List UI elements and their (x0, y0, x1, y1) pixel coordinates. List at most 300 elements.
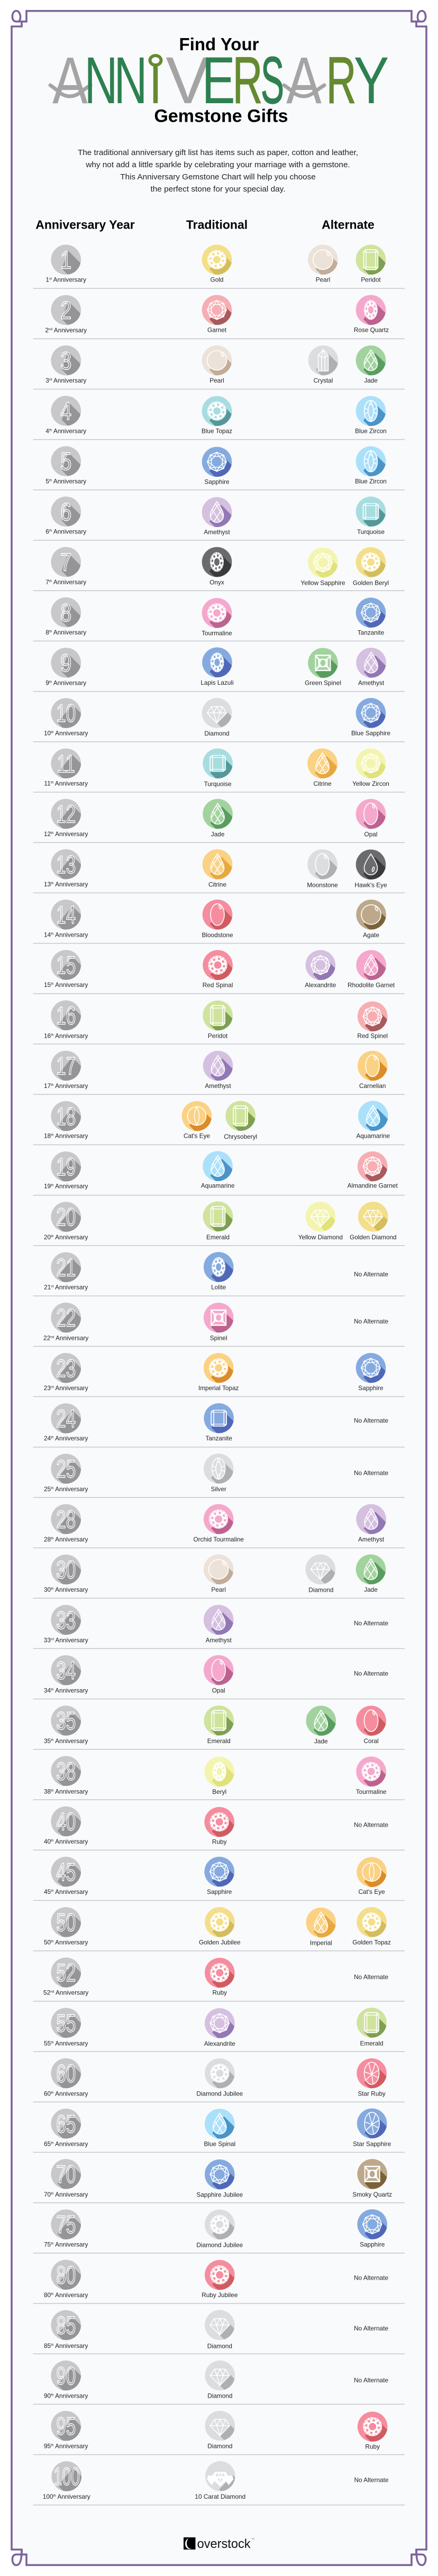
year badge 9: th (49, 680, 52, 684)
gem: Chrysoberyl: Chrysoberyl (224, 1133, 257, 1140)
year badge 13: Anniversary (54, 881, 88, 888)
year badge 12: th (51, 831, 54, 835)
year badge 75: 75 (56, 2210, 76, 2239)
title (50, 34, 389, 126)
gem: Almandine Garnet: Almandine Garnet (348, 1182, 398, 1190)
gem: Beryl: Beryl (212, 1788, 226, 1795)
gem: Diamond (202, 698, 243, 744)
gem: Ruby (205, 1958, 245, 2003)
gem: Yellow Zircon (352, 748, 396, 794)
gem: Blue Spinal: Blue Spinal (204, 2140, 235, 2148)
gem: Yellow Diamond: Yellow Diamond (298, 1233, 343, 1241)
year badge 9: 9 (45, 679, 49, 686)
year badge 85: 85 (44, 2342, 51, 2350)
gem: Amethyst (356, 1504, 397, 1550)
year badge 8: 8 (45, 629, 49, 636)
year badge 12 (44, 799, 94, 845)
gem: Blue Zircon (355, 396, 396, 442)
year badge 35: th (51, 1738, 54, 1742)
row: 13th anniversary (44, 849, 396, 895)
gem: Golden Jubilee (199, 1907, 245, 1953)
gem: Silver (204, 1454, 244, 1499)
gem: Star Ruby (357, 2058, 397, 2104)
year badge 12: 12 (44, 830, 51, 838)
year badge 7: 7 (60, 549, 71, 577)
gem: Aquamarine (356, 1101, 398, 1147)
heading: Find Your: Find Your (179, 34, 259, 54)
year badge 7: 7 (45, 578, 49, 586)
gem: Onyx: Onyx (209, 579, 224, 586)
gem: Hawk's Eye (354, 849, 396, 895)
year badge 23: Anniversary (54, 1384, 88, 1392)
year badge 12: 12 (56, 800, 76, 828)
row: 90th anniversary (44, 2361, 388, 2407)
gem: 10 Carat Diamond: 10 Carat Diamond (195, 2493, 245, 2500)
gem: Jade (356, 346, 396, 391)
gem: Peridot: Peridot (208, 1032, 228, 1040)
gem: Diamond (306, 1554, 347, 1601)
year badge 7: Anniversary (52, 578, 86, 586)
logo: overstock: overstock (197, 2537, 251, 2551)
year badge 1: Anniversary (52, 276, 86, 284)
gem: Coral: Coral (363, 1737, 379, 1745)
year badge 2: Anniversary (52, 326, 87, 334)
gem: Amethyst (356, 648, 397, 693)
column headings: Anniversary Year (35, 218, 135, 232)
year badge 3: 3 (60, 347, 71, 375)
year badge 6 (45, 496, 89, 542)
year badge 52: Anniversary (54, 1989, 88, 1996)
year badge 3: rd (49, 378, 52, 382)
year badge 21 (44, 1252, 94, 1298)
year badge 13: th (51, 882, 54, 885)
gem: Ruby: Ruby (213, 1989, 227, 1997)
gem: Blue Spinal (204, 2109, 245, 2154)
year badge 18: 18 (44, 1132, 51, 1140)
row: 18th anniversary (44, 1101, 398, 1147)
year badge 5: th (49, 478, 52, 483)
year badge 17 (44, 1051, 94, 1096)
row: 30th anniversary (44, 1554, 396, 1601)
year badge 45: th (51, 1889, 54, 1893)
year badge 24: Anniversary (54, 1435, 88, 1442)
year badge 65: 65 (44, 2140, 51, 2147)
gem: Aquamarine: Aquamarine (201, 1182, 235, 1190)
year badge 10: th (51, 730, 54, 734)
row: 16th anniversary (44, 1000, 398, 1047)
row: 55th anniversary (44, 2008, 397, 2054)
heading: Anniversary stylised word: I (149, 44, 162, 118)
year badge 24: 24 (56, 1404, 76, 1432)
gem: Pearl: Pearl (209, 377, 224, 384)
year badge 90: 90 (56, 2362, 76, 2390)
gem: Imperial: Imperial (310, 1939, 332, 1946)
gem: Red Spinal (203, 950, 243, 996)
year badge 95: th (51, 2444, 54, 2447)
gem: Sapphire: Sapphire (360, 2241, 385, 2248)
year badge 23 (44, 1353, 94, 1399)
year badge 30: 30 (56, 1556, 76, 1584)
gem: Tourmaline (202, 598, 242, 643)
year badge 45: 45 (56, 1858, 76, 1886)
year badge 14: Anniversary (54, 931, 88, 938)
heading: Anniversary stylised word (50, 43, 389, 118)
gem: Star Sapphire: Star Sapphire (353, 2140, 391, 2147)
gem: Spinel (204, 1303, 244, 1348)
gem: Jade (203, 799, 243, 845)
gem: Peridot: Peridot (361, 276, 381, 284)
year badge 25: 25 (44, 1485, 51, 1493)
note: no alternate: No Alternate (354, 1470, 388, 1477)
gem: Blue Zircon: Blue Zircon (355, 427, 387, 434)
gem: Beryl (204, 1757, 245, 1802)
note: no alternate: No Alternate (354, 2325, 388, 2332)
gem: Sapphire (202, 447, 242, 493)
row: 17th anniversary (44, 1051, 398, 1096)
year badge 13: 13 (56, 850, 76, 878)
gem: Rose Quartz (354, 295, 396, 341)
gem: Coral (356, 1706, 397, 1752)
row: 28th anniversary (44, 1504, 397, 1550)
row: 5th anniversary (45, 446, 396, 493)
year badge 6: 6 (60, 498, 71, 526)
gem: Pearl: Pearl (316, 276, 330, 284)
gem: Emerald (203, 1201, 243, 1247)
year badge 45 (44, 1857, 94, 1902)
gem: Amethyst (203, 1051, 243, 1096)
year badge 16: th (51, 1033, 54, 1037)
gem: Blue Sapphire: Blue Sapphire (351, 730, 390, 737)
row: 95th anniversary (44, 2411, 398, 2457)
year badge 52: 52 (56, 1958, 76, 1987)
year badge 10: 10 (56, 699, 76, 728)
gem: Amethyst: Amethyst (358, 679, 385, 687)
year badge 80: 80 (56, 2261, 76, 2289)
year badge 50: Anniversary (54, 1939, 88, 1946)
year badge 80: 80 (44, 2291, 51, 2299)
intro text block: The traditional anniversary gift list has items such as paper, cotton and leather, (78, 148, 358, 157)
gem: Alexandrite (305, 950, 346, 996)
year badge 19: 19 (44, 1183, 51, 1190)
year badge 2 (45, 295, 89, 340)
gem: Alexandrite (204, 2008, 245, 2054)
year badge 55: 55 (56, 2009, 76, 2037)
year badge 15 (44, 950, 94, 996)
year badge 50: th (51, 1940, 54, 1944)
gem: Tourmaline: Tourmaline (202, 629, 232, 637)
gem: Blue Zircon (355, 446, 396, 492)
gem: Ruby: Ruby (212, 1838, 227, 1846)
year badge 52: nd (50, 1990, 54, 1994)
gem: Golden Topaz: Golden Topaz (352, 1939, 391, 1946)
year badge 25 (44, 1454, 94, 1500)
row: 21st anniversary (44, 1252, 388, 1298)
year badge 85: Anniversary (54, 2342, 88, 2350)
year badge 15: 15 (56, 951, 76, 979)
year badge 95: Anniversary (54, 2443, 88, 2450)
gem: Amethyst (204, 1605, 244, 1650)
year badge 15: th (51, 982, 54, 986)
gem: Tourmaline: Tourmaline (356, 1788, 387, 1795)
year badge 85 (44, 2310, 94, 2356)
year badge 12: Anniversary (54, 830, 88, 838)
gem: Amethyst: Amethyst (204, 529, 230, 536)
year badge 4: th (49, 428, 52, 432)
gem: Golden Diamond: Golden Diamond (350, 1233, 397, 1241)
year badge 22 (43, 1303, 94, 1348)
year badge 50 (44, 1907, 94, 1953)
year badge 13: 13 (44, 881, 51, 888)
note: no alternate: No Alternate (354, 1973, 388, 1981)
gem: Sapphire (204, 1857, 245, 1902)
year badge 23: rd (51, 1385, 54, 1389)
year badge 22: Anniversary (54, 1334, 88, 1341)
year badge 25: 25 (56, 1455, 76, 1483)
gem: Amethyst: Amethyst (206, 1637, 232, 1644)
gem: Sapphire: Sapphire (358, 1384, 384, 1392)
year badge 100: 100 (43, 2493, 53, 2500)
year badge 100: Anniversary (56, 2493, 90, 2500)
gem: Peridot (203, 1001, 243, 1046)
year badge 90: Anniversary (54, 2392, 88, 2399)
year badge 80: Anniversary (54, 2291, 88, 2299)
year badge 25: th (51, 1486, 54, 1490)
row: 65th anniversary (44, 2108, 397, 2154)
gem: Diamond Jubilee (196, 2209, 245, 2255)
year badge 85: th (51, 2343, 54, 2347)
year badge 33: 33 (44, 1637, 51, 1644)
gem: Emerald (357, 2008, 397, 2053)
gem: Ruby (358, 2411, 398, 2457)
year badge 28: Anniversary (54, 1536, 88, 1543)
row: 1st anniversary (45, 244, 396, 291)
year badge 24: th (51, 1436, 54, 1439)
gem: Bloodstone (202, 900, 243, 945)
year badge 95: 95 (56, 2412, 76, 2440)
row: 70th anniversary (44, 2159, 398, 2205)
gem: Blue Topaz (202, 396, 242, 442)
row: 75th anniversary (44, 2209, 398, 2255)
year badge 85: 85 (56, 2311, 76, 2339)
year badge 20 (44, 1202, 94, 1248)
year badge 70 (44, 2159, 94, 2205)
gem: Peridot (356, 244, 396, 291)
year badge 60: 60 (56, 2060, 76, 2088)
gem: Jade: Jade (364, 377, 378, 384)
gem: Jade: Jade (364, 1586, 378, 1593)
year badge 11: Anniversary (53, 780, 88, 787)
year badge 90 (44, 2361, 94, 2406)
year badge 65: th (51, 2142, 54, 2145)
gem: Red Spinel (357, 1001, 398, 1047)
gem: Turquoise (203, 748, 243, 794)
gem: Tanzanite: Tanzanite (205, 1435, 232, 1442)
gem: Yellow Sapphire (300, 548, 348, 593)
gem: Golden Beryl: Golden Beryl (353, 579, 389, 586)
year badge 7 (45, 547, 89, 592)
year badge 17: th (51, 1083, 54, 1087)
year badge 16: 16 (44, 1032, 51, 1039)
year badge 95: 95 (44, 2443, 51, 2450)
row: 7th anniversary (45, 547, 396, 593)
gem: Emerald: Emerald (206, 1233, 230, 1241)
row: 6th anniversary (45, 496, 396, 543)
gem: Smoky Quartz: Smoky Quartz (352, 2191, 392, 2198)
year badge 55: 55 (44, 2040, 51, 2047)
year badge 65: 65 (56, 2110, 76, 2138)
year badge 23: 23 (56, 1354, 76, 1382)
year badge 9: 9 (60, 649, 71, 677)
heading: Anniversary stylised word: E (202, 43, 235, 117)
gem: Almandine Garnet (348, 1151, 398, 1197)
gem: Opal: Opal (364, 830, 377, 838)
gem: Golden Beryl (353, 547, 396, 593)
gem: Onyx (202, 547, 242, 593)
year badge 4: 4 (45, 427, 49, 434)
row: 34th anniversary (44, 1655, 388, 1701)
year badge 1 (45, 244, 89, 290)
intro text block: why not add a little sparkle by celebrating your marriage with a gemstone. (85, 160, 350, 169)
note: no alternate: No Alternate (354, 1417, 388, 1424)
row: 9th anniversary (45, 647, 397, 694)
gem: Ruby (204, 1807, 245, 1853)
year badge 6: Anniversary (52, 528, 86, 536)
year badge 11: 11 (57, 750, 75, 778)
gem: Diamond (205, 2310, 246, 2356)
year badge 30 (44, 1555, 94, 1600)
year badge 17: Anniversary (54, 1082, 88, 1090)
heading: Anniversary stylised word: N (84, 43, 118, 117)
heading: Anniversary stylised word: R (233, 44, 262, 118)
gem: Orchid Tourmaline: Orchid Tourmaline (193, 1536, 244, 1543)
year badge 38: 38 (56, 1757, 76, 1785)
gem: Yellow Zircon: Yellow Zircon (352, 780, 389, 787)
year badge 34: Anniversary (54, 1686, 88, 1694)
gem: Emerald: Emerald (360, 2039, 384, 2047)
year badge 21: st (51, 1285, 54, 1289)
gem: Smoky Quartz (352, 2159, 398, 2205)
row: 38th anniversary (44, 1756, 397, 1802)
year badge 22: 22 (43, 1334, 50, 1341)
year badge 75: th (51, 2242, 54, 2245)
year badge 25: Anniversary (54, 1485, 88, 1493)
gem: Sapphire: Sapphire (204, 478, 230, 486)
column headings (35, 218, 375, 232)
year badge 70: Anniversary (54, 2191, 88, 2198)
year badge 30: th (51, 1587, 54, 1591)
gem: Sapphire (356, 1353, 396, 1399)
year badge 5: 5 (60, 448, 71, 476)
gem: Chrysoberyl (224, 1101, 266, 1147)
year badge 8: Anniversary (52, 629, 86, 636)
gem: Hawk's Eye: Hawk's Eye (354, 881, 387, 888)
year badge 100: 100 (53, 2463, 80, 2491)
gem: Imperial Topaz: Imperial Topaz (198, 1384, 239, 1392)
year badge 22: 22 (56, 1304, 76, 1332)
gem: Jade (306, 1706, 346, 1752)
gem: Sapphire (357, 2209, 398, 2255)
gem: Jade: Jade (314, 1737, 328, 1745)
gem: Amethyst: Amethyst (358, 1536, 385, 1543)
gem: Rhodolite Garnet: Rhodolite Garnet (348, 982, 395, 989)
gem: Gold (202, 244, 242, 291)
row: 3rd anniversary (45, 346, 396, 391)
gem: Crystal: Crystal (314, 377, 333, 384)
year badge 55: Anniversary (54, 2040, 88, 2047)
gem: Ruby Jubilee: Ruby Jubilee (202, 2291, 238, 2299)
gem: Carnelian (358, 1051, 398, 1096)
gem: Carnelian: Carnelian (359, 1082, 386, 1090)
year badge 19: Anniversary (54, 1183, 88, 1190)
year badge 1: 1 (60, 246, 71, 274)
year badge 35 (44, 1706, 94, 1752)
year badge 40: Anniversary (54, 1838, 88, 1845)
gem: Opal (204, 1655, 244, 1701)
year badge 18 (44, 1101, 94, 1147)
gem: Ruby: Ruby (365, 2443, 380, 2450)
gem: Rhodolite Garnet (348, 950, 397, 996)
year badge 24: 24 (44, 1435, 51, 1442)
gem: Golden Topaz (352, 1907, 397, 1953)
year badge 60: th (51, 2091, 54, 2094)
row: 15th anniversary (44, 950, 397, 996)
gem: Emerald: Emerald (207, 1737, 231, 1745)
gem: Pearl: Pearl (211, 1586, 226, 1593)
gem: Lapis Lazuli: Lapis Lazuli (200, 679, 234, 686)
gem: Sapphire Jubilee (196, 2160, 245, 2205)
heading: Gemstone Gifts: Gemstone Gifts (154, 106, 288, 126)
row: 24th anniversary (44, 1403, 388, 1449)
year badge 90: 90 (44, 2392, 51, 2399)
year badge 19: th (51, 1184, 54, 1187)
year badge 50: 50 (56, 1908, 76, 1936)
heading: Anniversary stylised word: S (261, 44, 284, 117)
year badge 100 (43, 2461, 94, 2507)
year badge 17: 17 (44, 1082, 51, 1090)
year badge 16 (44, 1000, 94, 1046)
gem: Bloodstone: Bloodstone (202, 931, 233, 939)
year badge 10: 10 (44, 729, 51, 737)
row: 10th anniversary (44, 698, 396, 744)
row: 40th anniversary (44, 1807, 388, 1853)
year badge 28: th (51, 1537, 54, 1540)
note: no alternate: No Alternate (354, 2476, 389, 2483)
gem: Agate: Agate (363, 931, 379, 939)
row: 45th anniversary (44, 1857, 397, 1903)
gem: Diamond: Diamond (204, 730, 230, 737)
row: 50th anniversary (44, 1907, 397, 1953)
year badge 6: th (49, 529, 52, 533)
gem: Garnet: Garnet (207, 326, 227, 334)
row: 100th anniversary (43, 2461, 389, 2509)
year badge 8: th (49, 630, 52, 633)
row: 23rd anniversary (44, 1353, 396, 1399)
year badge 13 (44, 849, 94, 895)
year badge 35: 35 (44, 1737, 51, 1745)
gem: Turquoise (356, 496, 396, 542)
year badge 9: Anniversary (52, 679, 86, 686)
gem: Aquamarine: Aquamarine (356, 1132, 390, 1139)
logo: overstock: TM (251, 2537, 254, 2540)
year badge 33: rd (51, 1638, 54, 1641)
year badge 21: 21 (56, 1254, 76, 1282)
year badge 3 (45, 346, 89, 391)
year badge 70: 70 (44, 2191, 51, 2198)
gem: Lolite: Lolite (211, 1284, 226, 1291)
gem: Turquoise: Turquoise (357, 528, 385, 536)
row: 20th anniversary (44, 1201, 399, 1248)
gem: Sapphire: Sapphire (207, 1888, 232, 1895)
